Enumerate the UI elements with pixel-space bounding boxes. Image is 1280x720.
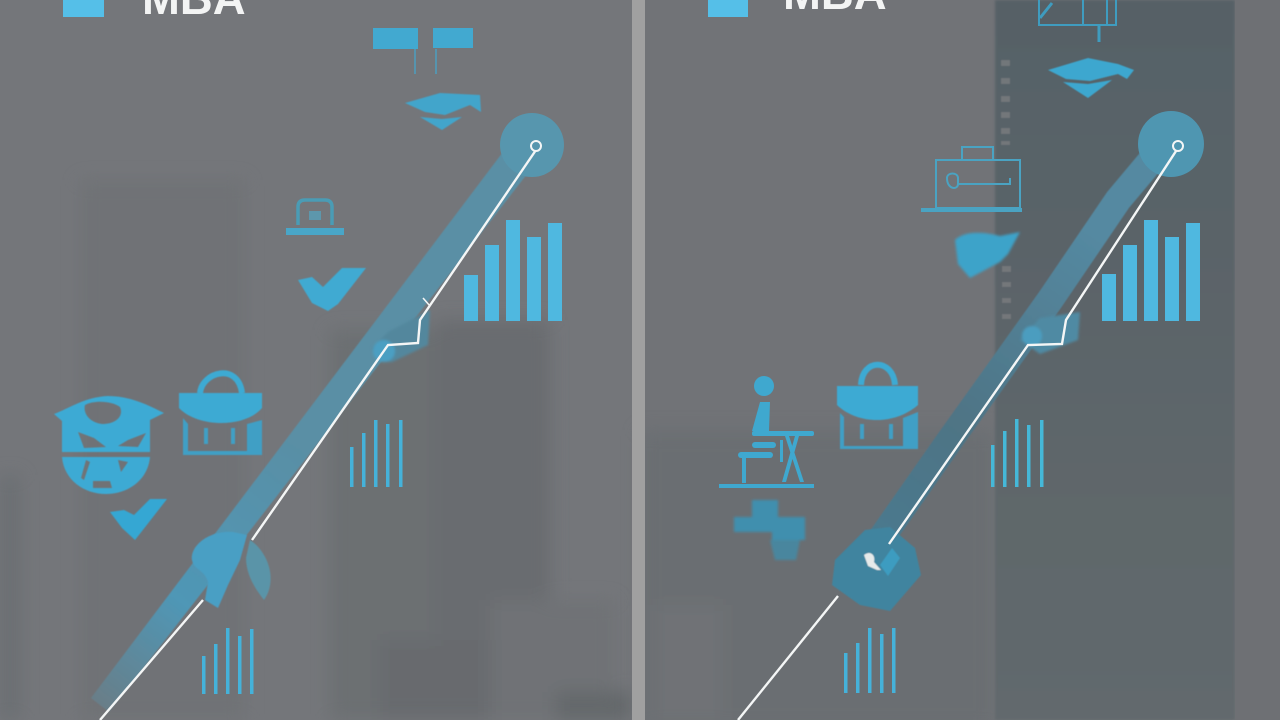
icon: left laptop lock (286, 200, 344, 235)
icon: left graduation globe emblem (54, 396, 164, 494)
white trend line (738, 148, 1178, 720)
right thin bar chart upper (991, 419, 1044, 487)
globe on arrow (832, 527, 921, 611)
right growth arrow (738, 111, 1204, 720)
icon: right briefcase filled (837, 365, 918, 449)
panel: left background skyline (0, 0, 632, 720)
icon: right blurred laptop cluster (734, 500, 805, 560)
icon: left checkmark (298, 268, 366, 311)
right bar chart large (1102, 220, 1200, 321)
icon: left graduation cap top (405, 93, 481, 130)
arrow end ring (1173, 141, 1183, 151)
left thin bar chart lower (202, 628, 254, 694)
arrow end ring (531, 141, 541, 151)
divider (632, 0, 645, 720)
left growth arrow (91, 113, 564, 720)
icon: left signpost top (373, 28, 473, 74)
icon: right open book top (1039, 0, 1116, 42)
right header: square icon and MBA title (708, 0, 887, 19)
icon: person at desk (719, 376, 814, 488)
icon: left small check below emblem (110, 499, 167, 540)
left header: square icon and MBA title (63, 0, 246, 24)
arrow band (880, 150, 1160, 540)
arrow head disc (1138, 111, 1204, 177)
panel: right background skyline (640, 0, 1280, 720)
kink highlight (1020, 312, 1080, 354)
left bar chart large (464, 220, 562, 321)
arrow head disc (500, 113, 564, 177)
icon: right briefcase outline (921, 147, 1022, 212)
right thin bar chart lower (844, 628, 896, 693)
icon: right blurred cap below briefcase (955, 232, 1020, 278)
left thin bar chart upper (350, 420, 402, 487)
globe on arrow (192, 532, 271, 608)
icon: right graduation cap top (1048, 58, 1134, 98)
icon: left briefcase (179, 373, 262, 455)
arrow band (91, 140, 538, 712)
white trend line (100, 150, 536, 720)
kink highlight (372, 310, 430, 362)
icon: blue square (63, 0, 104, 17)
icon: blue square right (708, 0, 748, 17)
